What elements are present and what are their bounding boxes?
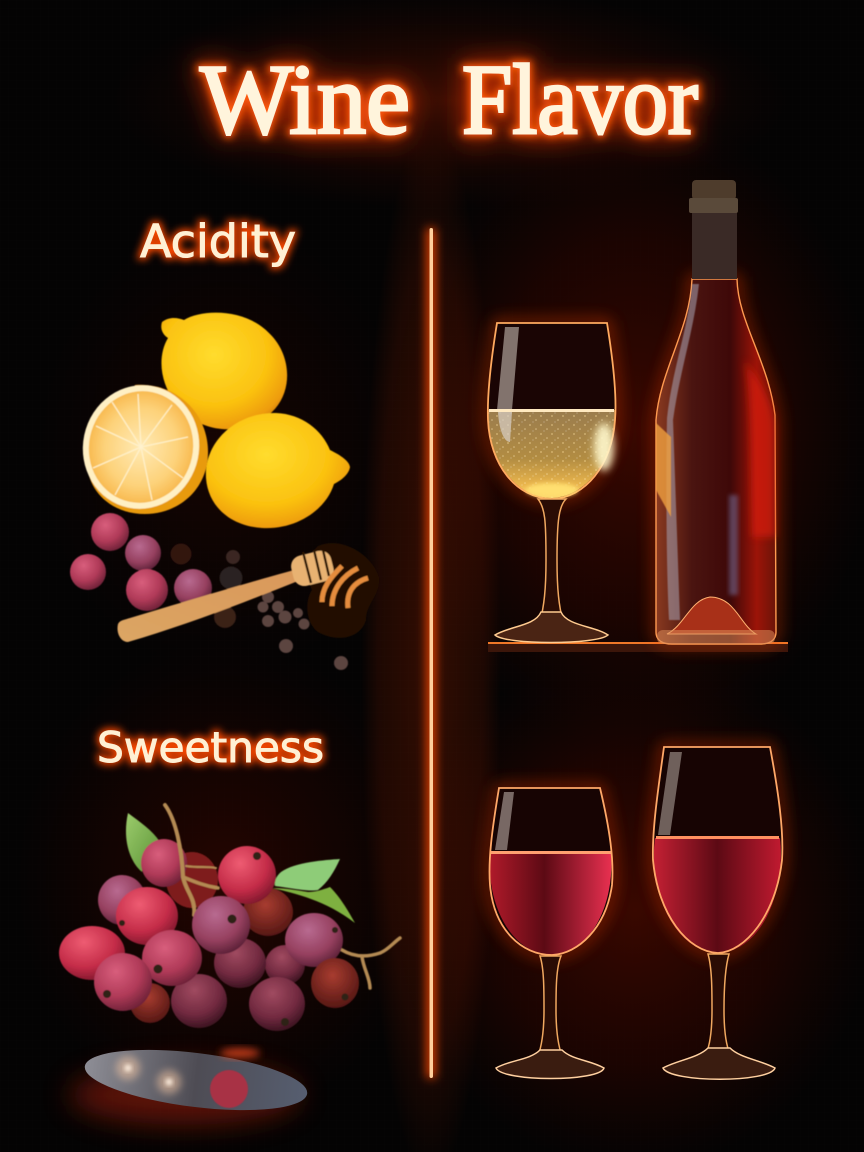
title: Wine	[200, 44, 410, 155]
red wine glass: right	[653, 747, 782, 1079]
bottle base	[667, 597, 756, 634]
heading: Sweetness: Sweetness	[97, 723, 324, 772]
lemon: right	[206, 413, 350, 528]
title: Flavor	[462, 44, 698, 155]
bottle highlights	[666, 284, 699, 620]
title: Flavor	[462, 44, 698, 155]
divider line	[427, 228, 435, 1078]
shelf	[488, 642, 788, 652]
title: Wine	[200, 44, 410, 155]
berries	[70, 513, 348, 670]
heading: Acidity: Acidity	[140, 215, 296, 268]
grape calyx marks	[103, 852, 348, 1026]
reflective plate	[70, 1040, 310, 1125]
dipper head	[289, 548, 368, 608]
bottle body	[656, 279, 776, 644]
grapes back	[98, 839, 305, 1028]
wine bottle	[656, 180, 776, 644]
title: Flavor	[462, 44, 698, 155]
heading: Sweetness: Sweetness	[97, 723, 324, 772]
title	[200, 44, 698, 155]
bottle capsule	[689, 180, 738, 279]
lemon: halved	[71, 374, 211, 520]
dipper stick	[117, 570, 298, 642]
lemons illustration	[71, 313, 350, 528]
red wine glass: left	[489, 788, 612, 1078]
leaves	[126, 813, 355, 923]
honey pool	[307, 543, 379, 638]
stem	[165, 805, 400, 988]
white wine glass	[488, 323, 616, 642]
lemon: top	[161, 313, 287, 429]
grape cluster illustration	[59, 805, 400, 1031]
berries and honey dipper illustration	[70, 513, 379, 670]
title: Wine	[200, 44, 410, 155]
heading: Acidity: Acidity	[140, 215, 296, 268]
grapes front	[59, 846, 359, 1031]
